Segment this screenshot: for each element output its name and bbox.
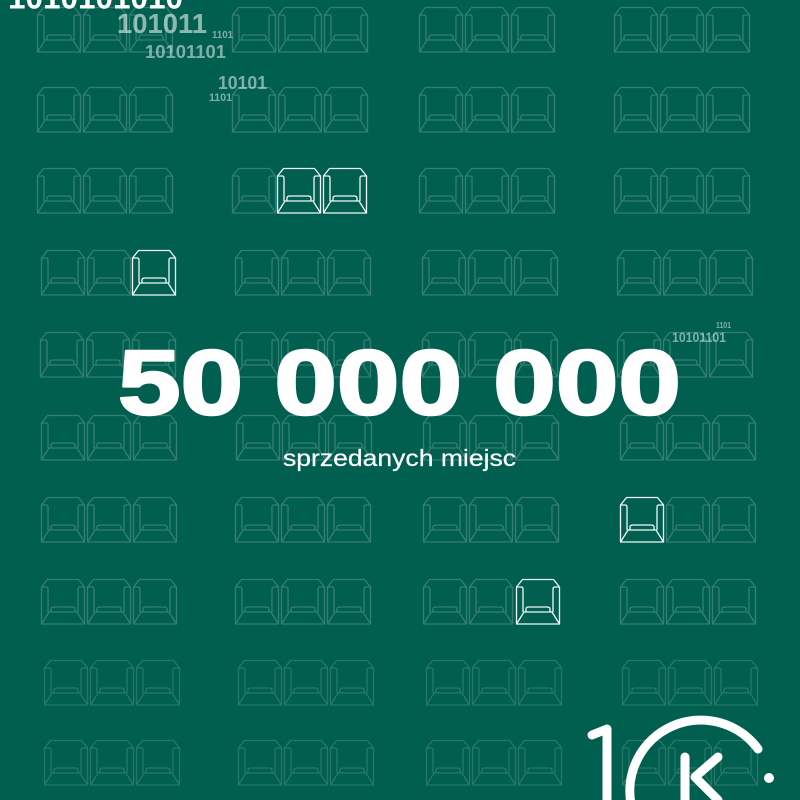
binary digits top left: 10101101: [145, 42, 226, 62]
binary digits right: 10101101: [672, 329, 726, 345]
seat row 3: [38, 168, 750, 213]
seat row 6: [42, 416, 756, 460]
highlighted seats: [132, 168, 664, 624]
seat row 10: [44, 740, 758, 785]
seat row 8: [42, 580, 756, 624]
binary digits right: [672, 321, 731, 345]
binary digits top left: 101011: [117, 8, 207, 39]
seat row 4: [42, 250, 752, 295]
seat row 5: [40, 332, 752, 377]
logo: 10 lat K: [592, 720, 774, 800]
seat row 9: [44, 660, 758, 705]
binary digits top left: 1101: [209, 92, 232, 104]
binary digits top left: 1101: [212, 30, 233, 41]
seat row 1: [38, 8, 750, 52]
seat row 7: [42, 498, 756, 542]
subheading: sprzedanych miejsc: [283, 445, 516, 471]
headline number: 50 000 000: [118, 332, 681, 434]
binary digits top left: [8, 0, 267, 104]
binary digits top left: 10101: [218, 73, 267, 93]
seat row 2: [38, 88, 750, 132]
binary digits right: 1101: [716, 321, 731, 330]
